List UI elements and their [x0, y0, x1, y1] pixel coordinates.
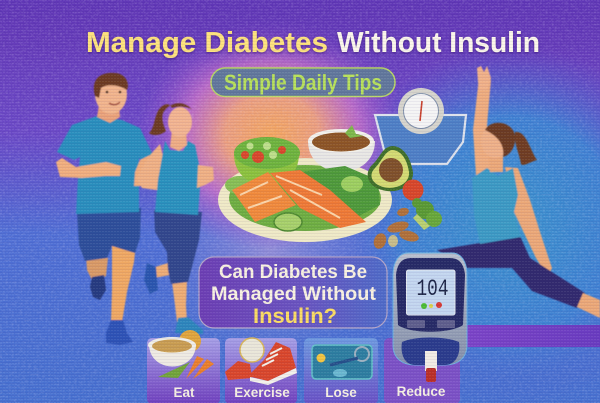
question callout: Can Diabetes Be	[219, 261, 367, 283]
dial face	[404, 94, 438, 128]
leggings	[437, 236, 585, 308]
hair	[94, 73, 128, 98]
food: avocado	[368, 146, 413, 191]
figure: male runner	[56, 73, 153, 345]
scale	[375, 88, 466, 164]
ponytail	[515, 132, 537, 165]
head	[95, 74, 127, 114]
dial	[398, 88, 444, 134]
lower leg	[172, 282, 187, 322]
tile: reduce	[384, 338, 460, 403]
foot	[577, 293, 600, 318]
face	[106, 91, 121, 105]
back leg	[86, 255, 108, 282]
title yellow part: Manage Diabetes	[86, 27, 328, 59]
food: almonds	[372, 207, 420, 251]
shorts	[77, 208, 141, 261]
reading: 104	[416, 276, 448, 302]
hair	[485, 123, 515, 157]
tile: exercise: Exercise	[234, 385, 290, 400]
tile: eat	[147, 330, 220, 403]
hair and ponytail	[149, 103, 192, 135]
title white part: Without Insulin	[337, 27, 540, 59]
tile: eat: Eat	[173, 385, 195, 400]
head	[481, 124, 509, 158]
tile: reduce: Reduce	[397, 384, 446, 399]
test strip	[425, 351, 437, 382]
far forearm	[134, 155, 150, 186]
question callout: Managed Without	[211, 283, 377, 305]
back lower leg	[152, 263, 170, 278]
back shoe	[90, 275, 106, 300]
glucose meter	[393, 253, 467, 382]
meter lower	[402, 338, 459, 365]
title	[86, 27, 540, 59]
food: broccoli	[412, 198, 442, 230]
tank top	[155, 141, 201, 215]
tile: exercise	[225, 338, 297, 403]
figure: female runner	[136, 103, 214, 334]
raised hand	[477, 66, 491, 90]
neck	[97, 105, 120, 123]
front shoe	[106, 320, 133, 345]
food: plate	[218, 158, 392, 242]
tile: lose: Lose	[325, 385, 357, 400]
front leg	[111, 244, 136, 322]
t-shirt	[57, 116, 153, 214]
food: salad bowl	[234, 137, 300, 186]
shoe	[175, 317, 203, 334]
question callout: Insulin?	[253, 305, 337, 328]
food: tomato	[402, 180, 424, 200]
raised arm	[473, 78, 493, 175]
neck	[488, 150, 503, 172]
meter body	[393, 253, 467, 365]
arm	[136, 144, 185, 192]
food: bean bowl	[308, 125, 375, 172]
screen	[406, 270, 455, 315]
far arm and hand	[197, 165, 214, 188]
neck	[170, 130, 187, 151]
tile: lose	[304, 338, 378, 403]
question callout	[199, 257, 387, 328]
food: salmon and greens	[232, 166, 380, 231]
purple floor band	[460, 325, 600, 347]
tank top	[472, 168, 521, 244]
needle	[420, 101, 422, 121]
buttons	[407, 320, 455, 328]
head	[168, 107, 192, 137]
subtitle pill: Simple Daily Tips	[224, 70, 382, 95]
status lights	[421, 302, 442, 309]
meter face	[396, 258, 465, 332]
forearm and fist	[56, 158, 121, 178]
leggings	[154, 210, 202, 284]
figure: stretching woman	[437, 66, 600, 318]
front arm	[505, 167, 552, 277]
scale body	[375, 115, 466, 164]
back shoe	[144, 263, 158, 294]
